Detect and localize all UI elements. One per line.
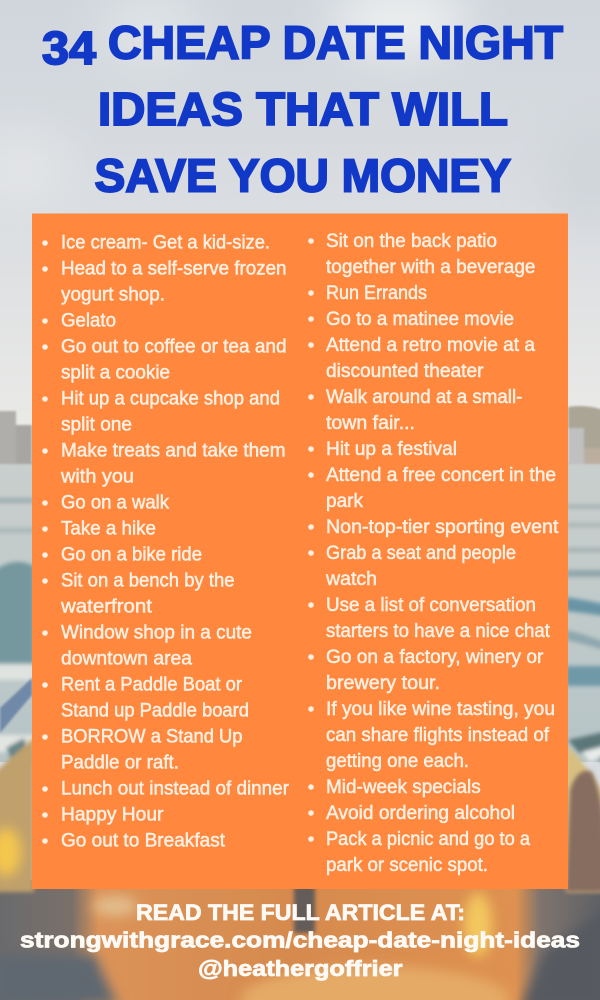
left column of ideas: yogurt shop. — [61, 285, 165, 306]
left column of ideas: Sit on a bench by the — [61, 571, 234, 592]
left column of ideas: split one — [61, 415, 132, 436]
left column of ideas: split a cookie — [61, 363, 170, 384]
left column of ideas: Go on a bike ride — [61, 545, 202, 566]
right column of ideas: getting one each. — [326, 751, 469, 772]
left column of ideas: Happy Hour — [61, 805, 164, 826]
right column of ideas: discounted theater — [326, 361, 484, 382]
right column of ideas: Attend a free concert in the — [326, 465, 556, 486]
left column of ideas: Take a hike — [61, 519, 156, 540]
right column of ideas: Sit on the back patio — [326, 231, 497, 252]
right column of ideas: Non-top-tier sporting event — [326, 517, 559, 538]
right column of ideas: town fair... — [326, 413, 415, 434]
right column of ideas: park — [326, 491, 363, 512]
right column of ideas: If you like wine tasting, you — [326, 699, 555, 720]
left column of ideas: BORROW a Stand Up — [61, 727, 242, 748]
right column of ideas: starters to have a nice chat — [326, 621, 551, 642]
footer call to action — [20, 900, 580, 981]
right column of ideas: Attend a retro movie at a — [326, 335, 535, 356]
right column of ideas: Walk around at a small- — [326, 387, 522, 408]
right column of ideas: Run Errands — [326, 283, 427, 304]
title line 2: IDEAS THAT WILL — [98, 83, 508, 135]
right column of ideas: Go to a matinee movie — [326, 309, 514, 330]
left column of ideas: with you — [60, 467, 134, 488]
left column of ideas: Lunch out instead of dinner — [61, 779, 290, 800]
left column of ideas: Ice cream- Get a kid-size. — [61, 233, 270, 254]
panel: list of ideas — [32, 214, 568, 889]
right column of ideas: Grab a seat and people — [326, 543, 516, 564]
title line 1: CHEAP DATE NIGHT — [108, 16, 563, 68]
left column of ideas: Head to a self-serve frozen — [61, 259, 286, 280]
left column of ideas: Go out to Breakfast — [61, 831, 226, 852]
footer social handle: @heathergoffrier — [198, 956, 403, 981]
title — [42, 16, 563, 202]
left column of ideas: Make treats and take them — [61, 441, 286, 462]
left column of ideas: Hit up a cupcake shop and — [61, 389, 280, 410]
title line 3: SAVE YOU MONEY — [94, 150, 511, 202]
right column of ideas: brewery tour. — [326, 673, 440, 694]
right column of ideas: watch — [325, 569, 377, 590]
right column of ideas — [308, 231, 559, 876]
left column of ideas: waterfront — [60, 597, 153, 618]
left column of ideas: Window shop in a cute — [61, 623, 252, 644]
right column of ideas: Pack a picnic and go to a — [326, 829, 530, 850]
right column of ideas: Mid-week specials — [326, 777, 481, 798]
footer heading: READ THE FULL ARTICLE AT: — [136, 900, 465, 925]
right column of ideas: Go on a factory, winery or — [326, 647, 544, 668]
right column of ideas: can share flights instead of — [326, 725, 550, 746]
left column of ideas — [42, 233, 290, 852]
right column of ideas: Hit up a festival — [326, 439, 457, 460]
left column of ideas: Go out to coffee or tea and — [61, 337, 286, 358]
right column of ideas: park or scenic spot. — [326, 855, 488, 876]
left column of ideas: Stand up Paddle board — [61, 701, 249, 722]
left column of ideas: Gelato — [61, 311, 116, 332]
right column of ideas: Avoid ordering alcohol — [326, 803, 515, 824]
footer article url: strongwithgrace.com/cheap-date-night-ideas — [20, 928, 580, 952]
left column of ideas: downtown area — [61, 649, 192, 670]
left column of ideas: Rent a Paddle Boat or — [61, 675, 243, 696]
left column of ideas: Go on a walk — [61, 493, 169, 514]
right column of ideas: together with a beverage — [326, 257, 536, 278]
right column of ideas: Use a list of conversation — [326, 595, 536, 616]
left column of ideas: Paddle or raft. — [61, 753, 179, 774]
title line 1 number: 34 — [42, 22, 96, 74]
